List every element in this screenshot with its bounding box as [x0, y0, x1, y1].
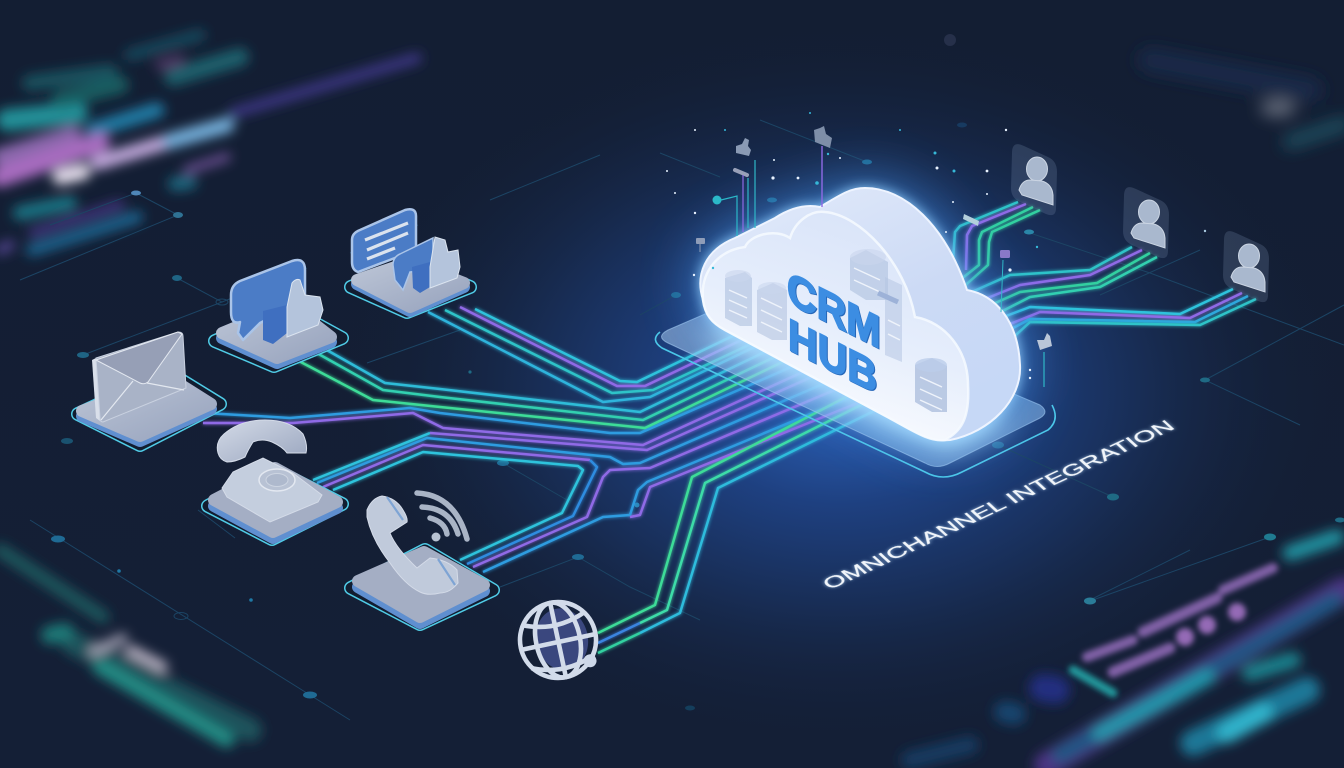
email platform	[78, 372, 220, 445]
icon: web globe	[513, 595, 603, 685]
user 1	[1011, 144, 1057, 215]
lines from CRM hub to user 2	[965, 247, 1157, 320]
small lock right	[1000, 250, 1010, 312]
user 2	[1123, 187, 1169, 258]
desk phone platform	[208, 468, 342, 539]
hub platform	[655, 288, 1055, 477]
cloud back volume	[700, 188, 1020, 440]
icon: floating thumb right	[1037, 333, 1052, 387]
title: CRM HUB: HUB	[788, 308, 877, 403]
blurred data streaks: top left	[0, 35, 417, 250]
icon: floating thumb top	[814, 126, 832, 207]
lines from chat channel	[428, 307, 790, 402]
title: CRM HUB: CRM	[787, 261, 880, 359]
blurred data streaks: bottom right	[910, 537, 1344, 765]
blurred data streaks: bottom left	[0, 550, 250, 740]
cloud front face	[703, 212, 968, 440]
icon: speech bubble	[231, 260, 305, 340]
chat platform	[351, 262, 470, 312]
server rack	[878, 277, 902, 362]
lines from social like channel	[297, 335, 820, 428]
mobile call channel	[351, 493, 493, 624]
pin with lines	[735, 170, 748, 232]
chat channel	[351, 209, 470, 312]
icon: thumbs up	[263, 279, 323, 344]
lines from desk phone channel	[313, 360, 860, 564]
icon: floating thumb left	[736, 138, 755, 228]
icon: user	[1131, 200, 1165, 248]
caption: Omnichannel Integration: OMNICHANNEL INTEGRATION	[818, 417, 1179, 593]
icon: telephone handset	[217, 420, 307, 462]
server stack 2	[757, 282, 787, 340]
like platform	[215, 305, 342, 366]
particles	[666, 112, 1206, 379]
icon: user	[1231, 244, 1265, 292]
email channel	[78, 332, 220, 445]
icon: envelope	[92, 332, 186, 422]
connector lines: channels to CRM hub	[203, 202, 1256, 653]
user 3	[1223, 231, 1269, 302]
icon: signal waves	[417, 493, 467, 542]
lines from email channel	[203, 350, 840, 445]
icon: user	[1019, 157, 1053, 205]
icon: message bubble	[352, 209, 416, 272]
blurred bars: bottom right detail	[1073, 568, 1273, 693]
desk phone channel	[208, 420, 342, 539]
lines from CRM hub to user 1	[952, 202, 1040, 290]
social like channel	[215, 260, 342, 366]
cloud hub	[700, 188, 1020, 440]
chip on user lines	[963, 214, 979, 226]
user panel	[1123, 187, 1169, 258]
icon: telephone body	[222, 458, 322, 522]
server stack 1	[725, 270, 752, 326]
user panel	[1011, 144, 1057, 215]
floating small icons and poles around cloud	[696, 126, 1052, 387]
server stack 4	[915, 358, 947, 412]
lines from web channel	[598, 395, 880, 653]
small lock left	[696, 238, 705, 252]
blurred streaks: top right	[1150, 60, 1344, 142]
title: CRM HUB	[787, 261, 880, 403]
teal node	[712, 196, 737, 236]
icon: thumbs up small	[393, 237, 460, 293]
server stack 3	[850, 249, 888, 300]
user panel	[1223, 231, 1269, 302]
icon: phone handset	[367, 496, 458, 594]
call platform	[351, 550, 493, 624]
lines from CRM hub to user 3	[990, 289, 1256, 345]
lines from mobile call channel	[473, 375, 885, 572]
cloud glow	[700, 188, 1020, 450]
